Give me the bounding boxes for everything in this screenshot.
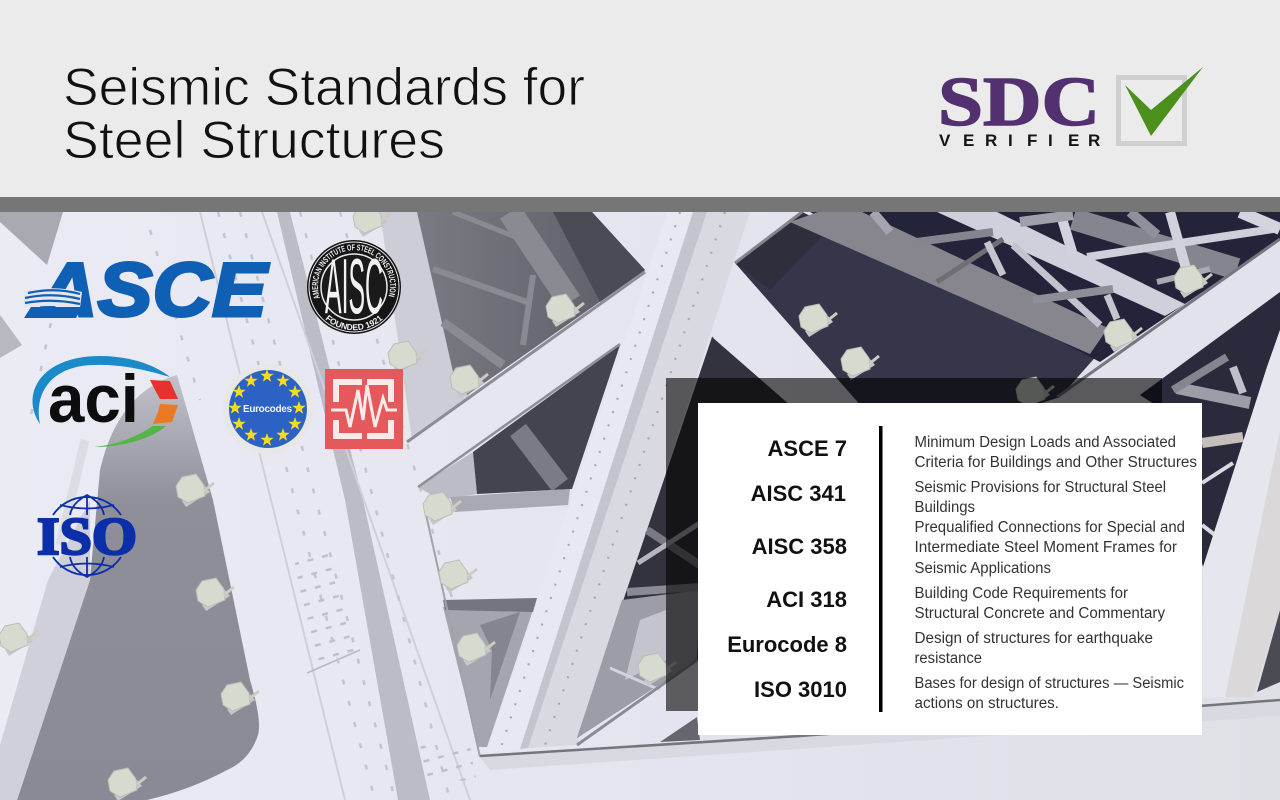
- standard descriptions column: Prequalified Connections for Special and: [914, 519, 1185, 536]
- logo: ISO: [37, 495, 137, 577]
- logo: AISC: FOUNDED 1921: [326, 314, 383, 330]
- standard codes column: ACI 318: [766, 587, 847, 612]
- rivet patches: [293, 548, 360, 668]
- header band: [0, 0, 1280, 212]
- logo: ASCE: ASCE: [36, 248, 269, 333]
- standard codes column: AISC 341: [751, 481, 846, 506]
- standard descriptions column: resistance: [914, 650, 982, 667]
- logo: AISC: [307, 240, 401, 334]
- right column: [1202, 330, 1280, 697]
- bottom plate edge: [660, 717, 700, 742]
- standards table panel: [698, 403, 1202, 735]
- standard codes column: Eurocode 8: [727, 632, 847, 657]
- window below beam: [418, 452, 477, 500]
- beam edge: [407, 272, 645, 442]
- left strip: [0, 500, 90, 800]
- standard descriptions column: Buildings: [914, 499, 975, 516]
- standard descriptions column: Design of structures for earthquake: [914, 630, 1153, 647]
- title: Steel Structures: [63, 111, 445, 170]
- logo: Eurocodes: [223, 364, 313, 454]
- standard codes column: ASCE 7: [768, 436, 847, 461]
- dark opening right of column: [577, 337, 830, 738]
- central column: [487, 212, 750, 752]
- standard descriptions column: actions on structures.: [914, 695, 1059, 712]
- big grey opening lower left: [17, 375, 259, 800]
- logo: SDC Verifier: VERIFIER: [939, 131, 1100, 150]
- white beam lower right: [1057, 239, 1280, 397]
- standard codes column: [727, 436, 847, 702]
- background photo: steel structure: [0, 204, 1280, 800]
- standard descriptions column: [914, 434, 1197, 712]
- text: AISC: [325, 242, 383, 330]
- logo: AISC: AMERICAN INSTITUTE OF STEEL CONSTRUCTION: [312, 244, 396, 298]
- standard descriptions column: Intermediate Steel Moment Frames for: [914, 539, 1177, 556]
- logo: ACI: [32, 356, 178, 447]
- navy opening upper right: [810, 212, 1280, 362]
- right window: [1140, 292, 1280, 567]
- sensors: [546, 294, 584, 327]
- standard descriptions column: Seismic Applications: [914, 560, 1051, 577]
- top-left shadow: [0, 212, 63, 265]
- truss beams: [790, 212, 1108, 354]
- standard descriptions column: Bases for design of structures — Seismic: [914, 675, 1184, 692]
- logo: Eurocodes: Eurocodes: [243, 404, 292, 415]
- title: Seismic Standards for: [63, 58, 585, 117]
- standard descriptions column: Structural Concrete and Commentary: [914, 605, 1165, 622]
- standard descriptions column: Criteria for Buildings and Other Structures: [914, 454, 1197, 471]
- standard descriptions column: Seismic Provisions for Structural Steel: [914, 479, 1166, 496]
- title: [63, 58, 585, 170]
- logo: seismic red square: [325, 369, 403, 449]
- large mesh opening: [735, 212, 1100, 450]
- logo: SDC Verifier: [938, 64, 1203, 150]
- logo: ISO: ISO: [37, 508, 137, 566]
- standard codes column: ISO 3010: [754, 677, 847, 702]
- standard descriptions column: Building Code Requirements for: [914, 585, 1128, 602]
- window upper centre: [417, 212, 645, 395]
- divider: [879, 426, 882, 712]
- standard descriptions column: Minimum Design Loads and Associated: [914, 434, 1176, 451]
- logo: SDC Verifier: SDC: [938, 64, 1100, 141]
- lower left of column: [443, 607, 533, 747]
- column strips and edges: [277, 212, 430, 800]
- logo: ACI: aci: [48, 361, 139, 437]
- dark overlay panel: [666, 378, 1162, 711]
- standard codes column: AISC 358: [752, 534, 847, 559]
